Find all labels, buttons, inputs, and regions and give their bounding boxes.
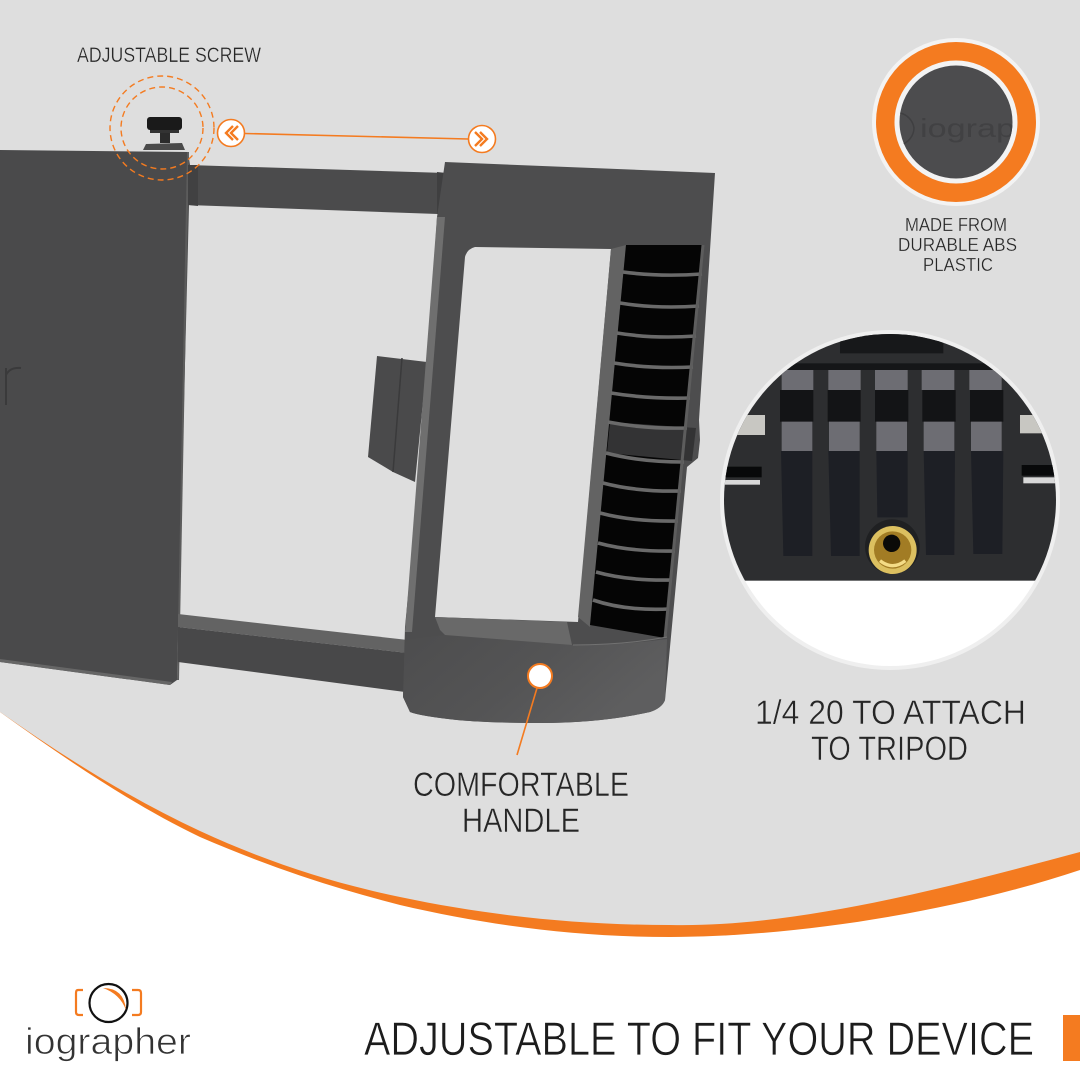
label: material: PLASTIC — [923, 254, 993, 275]
logo: iographer — [25, 984, 191, 1062]
grip slots — [590, 245, 703, 638]
material swatch badge: iograp — [920, 113, 1015, 143]
logo mark — [76, 984, 141, 1022]
left body of grip — [0, 150, 190, 685]
label: adjustable screw: ADJUSTABLE SCREW — [77, 44, 261, 67]
adjustment arrow — [218, 120, 496, 152]
logo wordmark: iographer — [25, 1021, 191, 1062]
frame ledge under window — [435, 617, 572, 645]
orange accent bar — [1063, 1015, 1080, 1061]
label: material: MADE FROM — [905, 214, 1007, 235]
label: tripod mount: 1/4 20 TO ATTACH — [755, 694, 1026, 732]
grip strip beside window — [578, 245, 626, 627]
handle base shading — [403, 635, 667, 723]
light edge of frame — [405, 217, 445, 632]
side pieces — [738, 415, 765, 435]
label: material: DURABLE ABS — [898, 234, 1017, 255]
label: tripod mount: TO TRIPOD — [811, 730, 968, 768]
material swatch badge — [872, 38, 1040, 206]
icon: thumb screw — [143, 117, 185, 150]
label: material — [898, 214, 1017, 275]
brass insert — [865, 519, 920, 574]
label: comfortable handle: HANDLE — [462, 802, 580, 840]
dashed target circles — [110, 76, 214, 180]
label: tripod mount — [755, 694, 1026, 768]
bottom rail — [178, 614, 408, 692]
product: adjustable phone grip — [0, 150, 715, 723]
handle callout marker — [517, 664, 552, 755]
slots — [782, 370, 813, 390]
label: comfortable handle: COMFORTABLE — [413, 766, 629, 804]
tripod mount close-up — [720, 330, 1060, 670]
label: comfortable handle — [413, 766, 629, 840]
handle base crease line — [573, 637, 667, 645]
top rail — [188, 165, 446, 214]
clip tab — [368, 356, 427, 482]
handle frame — [403, 162, 715, 723]
